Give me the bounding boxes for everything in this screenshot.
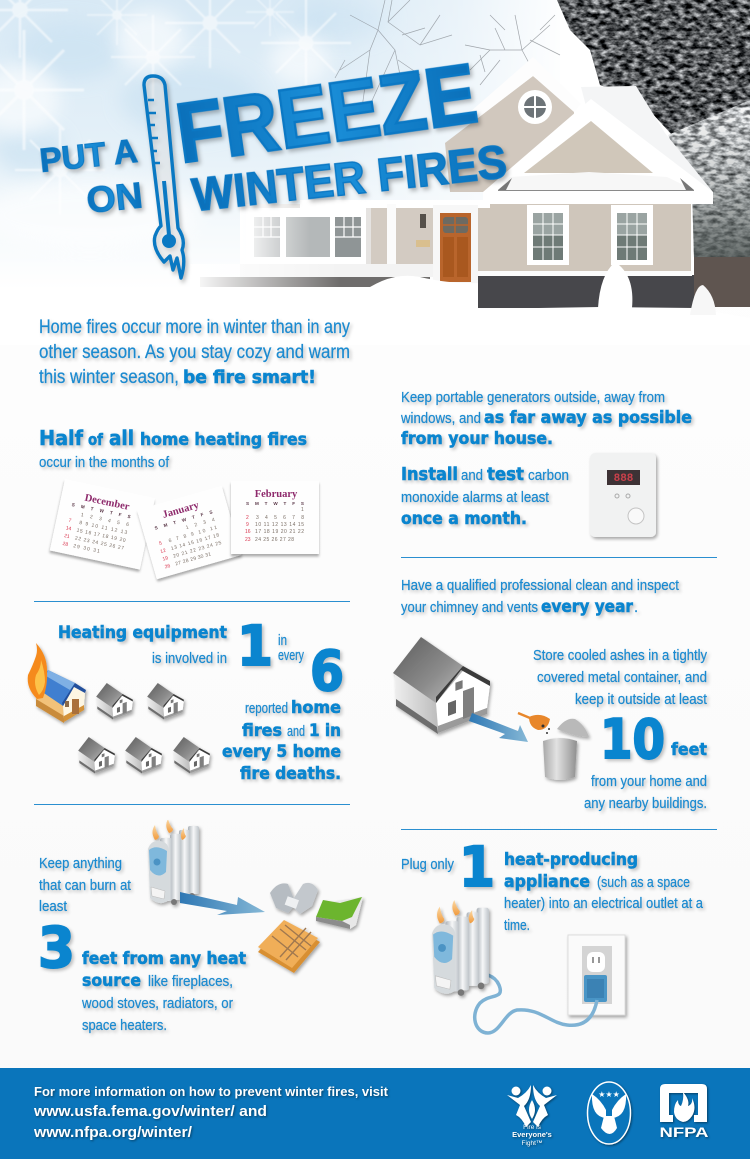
plug only one appliance text: 1	[459, 835, 495, 899]
icon: house on fire	[28, 643, 86, 723]
icon: plugged-in heater	[432, 900, 489, 996]
calendars	[50, 479, 319, 579]
calendar: december: 8 9 10 11 12 13	[79, 520, 128, 536]
chimney text: your chimney and vents	[401, 599, 538, 616]
calendar: december: 7	[68, 518, 72, 524]
icon: ash scoop	[518, 713, 550, 734]
heating equipment statistic: Heating equipment	[58, 623, 227, 643]
calendar: january: 6 7 8 9 10 11	[168, 525, 218, 544]
calendar: january: 12	[160, 548, 167, 555]
logo: nfpa	[660, 1084, 708, 1140]
footer band	[0, 1068, 750, 1159]
icon: power cord	[475, 975, 597, 1033]
heating equipment statistic: 1	[237, 614, 273, 678]
calendar: january: 13 14 15 16 17 18	[170, 532, 220, 552]
heating equipment statistic	[58, 614, 344, 783]
half of all heating fires heading: home heating fires	[140, 430, 307, 450]
calendar: january: 27 28 29 30 31	[175, 551, 212, 567]
generators text: from your house.	[401, 429, 553, 448]
footer text: For more information on how to prevent winter fires, visit	[34, 1084, 389, 1099]
plug only one appliance text: appliance	[504, 872, 590, 891]
snowy branches right	[668, 100, 750, 258]
intro text	[39, 317, 350, 388]
arrow: house to ash can	[469, 713, 528, 742]
logo: fire is everyone's fight	[507, 1085, 557, 1147]
heating equipment statistic: in	[278, 632, 287, 649]
calendar: december: 14	[65, 525, 72, 532]
three feet safety text: that can burn at	[39, 877, 132, 894]
three feet safety text: least	[39, 898, 68, 915]
generators text: as far away as possible	[484, 408, 692, 427]
title: put a: PUT A	[38, 132, 139, 179]
three feet safety text: like fireplaces,	[148, 973, 233, 990]
heating equipment statistic: is involved in	[152, 650, 227, 667]
calendar: december: 29 30 31	[73, 543, 100, 555]
header photo: winter house scene	[0, 0, 750, 308]
calendar: january: 5	[158, 540, 163, 547]
intro text: be fire smart!	[183, 367, 316, 388]
generators text: Keep portable generators outside, away from	[401, 389, 665, 406]
bare trees	[335, 0, 560, 108]
icon: carbon monoxide alarm	[590, 453, 656, 537]
logo: usfa seal	[588, 1082, 630, 1144]
carbon monoxide text: carbon	[528, 467, 569, 484]
carbon monoxide text: Install	[401, 464, 458, 485]
carbon monoxide text: once a month.	[401, 509, 527, 528]
calendar: december	[50, 479, 155, 570]
calendar: february: 2	[246, 515, 249, 521]
ashes distance text: keep it outside at least	[575, 691, 708, 708]
calendar: january: S M T W T F S	[154, 509, 213, 531]
ashes distance text: feet	[671, 740, 707, 759]
arrow: heater to belongings	[180, 892, 265, 915]
three feet safety text: space heaters.	[82, 1017, 167, 1034]
icon: gray houses	[78, 683, 210, 774]
plug only one appliance text: heat-producing	[504, 850, 638, 869]
three feet safety text: source	[82, 971, 141, 990]
calendar: february: 3 4 5 6 7 8	[256, 515, 304, 521]
three feet safety text: feet from any heat	[82, 949, 246, 968]
spruce tree mass	[550, 0, 750, 140]
plug only one appliance text	[401, 835, 704, 934]
three feet safety text: Keep anything	[39, 855, 122, 872]
calendar: february: 10 11 12 13 14 15	[255, 522, 304, 528]
divider right 1	[401, 557, 717, 558]
logo: fire is everyone's fight: Fire is	[523, 1124, 542, 1131]
half of all heating fires heading: occur in the months of	[39, 454, 170, 471]
calendar: january	[137, 486, 241, 579]
carbon monoxide text: monoxide alarms at least	[401, 489, 550, 506]
round gable window	[518, 90, 552, 124]
heating equipment statistic: every	[278, 647, 304, 664]
divider left 1	[34, 601, 350, 602]
calendar: january: 19	[162, 555, 169, 563]
calendar: february	[231, 481, 319, 554]
calendar: january: 26	[164, 563, 171, 570]
calendar: december: S M T W T F S	[71, 502, 131, 519]
logo: fire is everyone's fight: Everyone's	[512, 1130, 552, 1139]
title: on: ON	[85, 174, 145, 221]
calendar: december: 28	[62, 541, 69, 548]
title lockup	[38, 46, 509, 278]
ashes distance text	[533, 647, 708, 812]
heating equipment statistic: fires	[242, 721, 282, 740]
generators text: windows, and	[400, 410, 481, 427]
intro text: other season. As you stay cozy and warm	[39, 342, 350, 363]
half of all heating fires heading: of	[88, 430, 104, 449]
calendar: february: 17 18 19 20 21 22	[255, 529, 304, 535]
calendar: february: 16	[245, 529, 251, 535]
calendar: january: 20 21 22 23 24 25	[172, 540, 222, 560]
heating equipment statistic: and	[287, 723, 305, 740]
divider left 2	[34, 804, 350, 805]
half of all heating fires heading: all	[109, 426, 134, 450]
calendar: february: 1	[301, 507, 304, 513]
calendar: february: 9	[246, 522, 249, 528]
chimney text: .	[634, 599, 638, 616]
icon: frozen thermometer	[144, 76, 184, 278]
icon: wall outlet	[568, 935, 625, 1015]
fence	[694, 257, 750, 307]
ashes distance text: 10	[600, 708, 665, 771]
plug only one appliance text: heater) into an electrical outlet at a	[504, 895, 704, 912]
calendar: december: 22 23 24 25 26 27	[74, 535, 125, 552]
right windows	[527, 205, 653, 265]
icon: space heater	[148, 819, 199, 905]
plug only one appliance text: time.	[504, 917, 530, 934]
ashes distance text: any nearby buildings.	[584, 795, 707, 812]
calendar: december: 15 16 17 18 19 20	[76, 528, 126, 544]
plug only one appliance text: (such as a space	[597, 874, 690, 891]
calendar: december: 1 2 3 4 5 6	[80, 512, 130, 528]
plug only one appliance text: Plug only	[401, 856, 454, 873]
carbon monoxide text	[401, 464, 569, 528]
carbon monoxide text: test	[487, 464, 524, 485]
three feet safety text	[38, 855, 246, 1034]
calendar: february: 24 25 26 27 28	[255, 537, 294, 543]
title: winter fires: WINTER FIRES	[189, 135, 509, 221]
logo: nfpa: NFPA	[660, 1124, 708, 1140]
ashes distance text: from your home and	[591, 773, 707, 790]
calendar: january: January	[161, 500, 201, 521]
carbon monoxide text: and	[461, 467, 483, 484]
chimney text: every year	[541, 597, 634, 616]
house walls	[246, 57, 713, 276]
calendar: january: 1 2 3 4	[185, 517, 216, 531]
calendar: december: 21	[63, 533, 70, 540]
three feet safety text: 3	[38, 916, 75, 981]
heating equipment statistic: reported	[245, 700, 288, 717]
picture window	[240, 204, 366, 278]
icon: green book	[316, 897, 363, 929]
calendar: february: 23	[245, 537, 251, 543]
heating equipment statistic: fire deaths.	[240, 764, 341, 783]
chimney text	[401, 577, 680, 616]
heating equipment statistic: 1 in	[309, 721, 341, 740]
divider right 2	[401, 829, 717, 830]
stone foundation and snow ground	[0, 262, 750, 345]
calendar: february: February	[255, 489, 298, 500]
title: freeze: FREEZE	[170, 46, 483, 181]
front door	[387, 204, 478, 283]
icon: plaid blanket	[258, 920, 320, 973]
frost sky backdrop	[0, 0, 750, 290]
three feet safety text: wood stoves, radiators, or	[81, 995, 233, 1012]
ashes distance text: Store cooled ashes in a tightly	[533, 647, 707, 664]
generators text	[400, 389, 692, 448]
calendar: december: December	[84, 493, 131, 513]
logo: fire is everyone's fight: Fight™	[522, 1140, 542, 1147]
half of all heating fires heading: Half	[39, 426, 83, 450]
half of all heating fires heading	[39, 426, 307, 471]
intro text: Home fires occur more in winter than in any	[39, 317, 350, 338]
heating equipment statistic: 6	[310, 639, 344, 703]
icon: large gray house	[393, 637, 490, 734]
footer text	[33, 1084, 389, 1141]
icon: metal ash can	[543, 719, 589, 780]
heating equipment statistic: every 5 home	[222, 742, 341, 761]
heating equipment statistic: home	[291, 698, 341, 717]
logo: usfa seal: ★★★	[598, 1090, 620, 1099]
calendar: february: S M T W T F S	[246, 501, 304, 506]
intro text: this winter season,	[39, 367, 179, 388]
chimney text: Have a qualified professional clean and inspect	[401, 577, 680, 594]
footer text: www.nfpa.org/winter/	[33, 1124, 193, 1141]
icon: carbon monoxide alarm: 888	[614, 473, 634, 485]
footer text: www.usfa.fema.gov/winter/ and	[33, 1103, 267, 1120]
ashes distance text: covered metal container, and	[537, 669, 707, 686]
icon: gloves	[270, 883, 318, 914]
